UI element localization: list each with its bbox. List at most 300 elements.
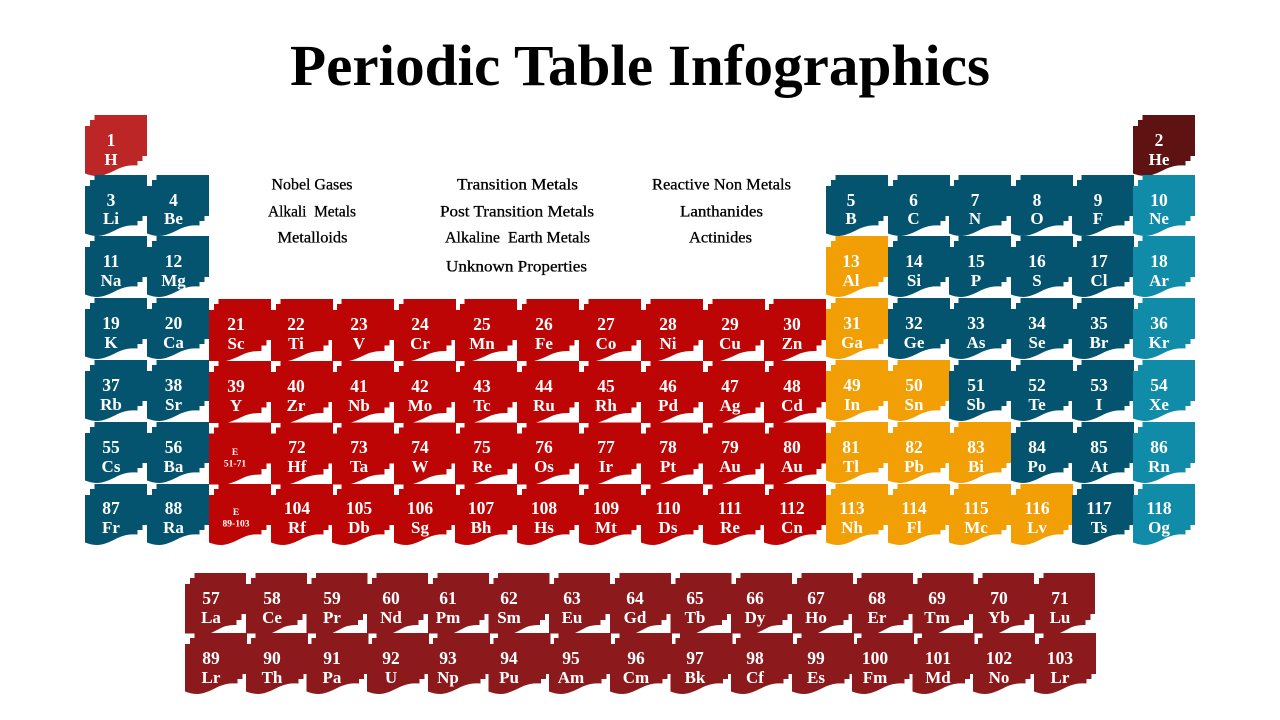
tile: Zr [271, 361, 333, 423]
tile: Tb: Tb [685, 608, 705, 627]
tile: Fl: 114 [901, 498, 927, 518]
tile: Lr 89 [185, 633, 247, 694]
tile: Sr [147, 360, 209, 421]
tile: Bi: 83 [967, 437, 985, 457]
tile: H [85, 115, 147, 176]
tile: S: 16 [1028, 251, 1046, 271]
tile: Fr: 87 [102, 498, 120, 518]
tile: Ce: 58 [263, 588, 281, 608]
tile: Gd: Gd [624, 608, 647, 627]
tile: Re 111 [703, 484, 765, 545]
tile: Po [1011, 422, 1073, 483]
tile: Si: 14 [905, 251, 923, 271]
tile: Se: 34 [1028, 313, 1046, 333]
tile: K: K [104, 333, 118, 352]
tile: Re 111: Re [720, 518, 740, 537]
tile: Ho: 67 [807, 588, 825, 608]
tile: W: W [412, 457, 428, 476]
tile: Ra: 88 [165, 498, 182, 518]
tile: In: In [844, 395, 861, 414]
tile: Nb [332, 361, 394, 423]
tile: As: As [967, 333, 986, 352]
tile: F [1072, 175, 1134, 236]
tile: Tm: 69 [928, 588, 946, 608]
tile: As [949, 298, 1011, 359]
tile: Ba: Ba [164, 457, 184, 476]
tile: Tl: 81 [842, 437, 860, 457]
tile: Md [912, 633, 974, 694]
tile: lanthanide series placeholder: E [232, 448, 238, 458]
tile: Ne: 10 [1150, 190, 1168, 210]
tile: Rn [1133, 422, 1195, 483]
tile: Y: Y [230, 396, 242, 415]
tile: Gd [610, 573, 671, 634]
tile: Os: Os [534, 457, 554, 476]
tile: Nd: 60 [382, 588, 400, 608]
tile: Os: 76 [535, 437, 553, 457]
tile: Mt [579, 484, 641, 545]
tile: Mo: 42 [411, 376, 429, 396]
tile: Zr: Zr [287, 396, 306, 415]
tile: Sc: 21 [227, 314, 245, 334]
tile: Zn: 30 [783, 314, 801, 334]
tile: Yb: Yb [988, 608, 1010, 627]
tile: Sm: Sm [497, 608, 521, 627]
tile: Nb: 41 [350, 376, 368, 396]
tile: Xe [1133, 360, 1195, 421]
tile: Yb [973, 573, 1034, 634]
panel: lanthanides and actinides [185, 573, 1096, 694]
tile: Os [517, 422, 579, 484]
tile: Li [85, 175, 147, 236]
tile: Pd: Pd [658, 396, 678, 415]
tile: W [394, 422, 456, 484]
tile: Re: Re [472, 457, 492, 476]
tile: Es: 99 [807, 648, 825, 668]
tile: P: 15 [967, 251, 985, 271]
tile: Ir [579, 422, 641, 484]
tile: Lv: 116 [1024, 498, 1050, 518]
tile: He: 2 [1155, 130, 1163, 150]
tile: Cr [394, 299, 456, 361]
tile: H: 1 [107, 130, 115, 150]
tile: Ag: Ag [720, 396, 741, 415]
tile: Hf: 72 [288, 437, 306, 457]
legend [268, 176, 791, 276]
tile: Ds: 110 [655, 498, 681, 518]
tile: S: S [1032, 271, 1042, 290]
tile: Fm: 100 [862, 648, 888, 668]
tile: Cm [610, 633, 672, 694]
tile: Ds [641, 484, 703, 545]
legend: metalloids: Metalloids [278, 230, 348, 246]
tile: Cs [85, 422, 147, 483]
tile: Eu: 63 [563, 588, 581, 608]
tile: Ni: 28 [659, 314, 677, 334]
tile: Bk: 97 [686, 648, 704, 668]
tile: Ga: Ga [841, 333, 863, 352]
tile: U [367, 633, 429, 694]
tile: Nd [367, 573, 428, 634]
tile: Og [1133, 484, 1195, 545]
tile: Tl: Tl [843, 457, 859, 476]
tile: Ag: 47 [721, 376, 739, 396]
tile: Rh: 45 [597, 376, 615, 396]
tile: Pu: Pu [499, 668, 519, 687]
legend: nobel gases: Nobel Gases [272, 176, 352, 194]
tile: Ni: Ni [660, 334, 677, 353]
tile: Na [85, 236, 147, 297]
tile: Ru: 44 [535, 376, 553, 396]
tile: Sn [888, 360, 950, 421]
tile: Cf [731, 633, 793, 694]
tile: Hs: Hs [534, 518, 554, 537]
tile: Pb: 82 [905, 437, 923, 457]
tile: Kr: 36 [1150, 313, 1168, 333]
tile: Lv [1011, 484, 1073, 545]
tile: Ne: Ne [1149, 209, 1169, 228]
tile: Y: 39 [227, 376, 245, 396]
tile: Ra: Ra [163, 518, 184, 537]
tile: Mc: 115 [963, 498, 989, 518]
tile: Mn: Mn [469, 334, 495, 353]
tile: Xe: 54 [1150, 375, 1168, 395]
tile: Db [332, 484, 394, 545]
tile: Mo [394, 361, 456, 423]
tile: Ra [147, 484, 209, 545]
tile: Cn: Cn [781, 518, 803, 537]
tile: Nh: 113 [839, 498, 865, 518]
tile: Md: 101 [925, 648, 951, 668]
tile: I: 53 [1090, 375, 1108, 395]
tile: actinide series placeholder: E [233, 508, 239, 518]
tile: Tb [670, 573, 732, 634]
tile: Bh: Bh [471, 518, 492, 537]
tile: Mg: 12 [165, 251, 182, 271]
tile: In: 49 [843, 375, 861, 395]
tile: Kr: Kr [1149, 333, 1170, 352]
tile: Cs: 55 [102, 437, 120, 457]
tile: Mc: Mc [964, 518, 988, 537]
tile: Ni [641, 299, 703, 361]
tile: Pu: 94 [500, 648, 518, 668]
tile: No: 102 [986, 648, 1012, 668]
tile: I [1072, 360, 1134, 421]
tile: C [888, 175, 950, 236]
tile: Cu: Cu [719, 334, 741, 353]
tile: Lu [1034, 573, 1095, 634]
tile: Fr [85, 484, 147, 545]
tile: Pt [641, 422, 703, 484]
tile: Co: 27 [597, 314, 615, 334]
tile: Bk: Bk [685, 668, 706, 687]
tile: Lr 103: 103 [1047, 648, 1073, 668]
tile: Po: Po [1028, 457, 1046, 476]
tile: Nh [826, 484, 888, 545]
tile: C: 6 [909, 190, 918, 210]
tile: Lv: Lv [1027, 518, 1047, 537]
tile: Db: 105 [346, 498, 372, 518]
tile: Cl: 17 [1090, 251, 1108, 271]
tile: Db: Db [348, 518, 370, 537]
tile: K [85, 298, 147, 359]
tile: Bi: Bi [968, 457, 984, 476]
tile: La [185, 573, 246, 634]
tile: Au 79: Au [719, 457, 741, 476]
tile: Ru: Ru [533, 396, 555, 415]
tile: Ca: 20 [165, 313, 182, 333]
tile: Lr 103 [1034, 633, 1096, 694]
tile: Na: 11 [103, 251, 119, 271]
tile: N: N [969, 209, 982, 228]
tile: N [949, 175, 1011, 236]
tile: Pt: Pt [660, 457, 676, 476]
tile: W: 74 [411, 437, 429, 457]
tile: Rb: Rb [100, 395, 122, 414]
tile: Cn: 112 [779, 498, 805, 518]
legend: post transition metals: Post Transition Metals [440, 204, 594, 220]
tile: No [973, 633, 1035, 694]
tile: Te [1011, 360, 1073, 421]
tile: Sb: Sb [967, 395, 985, 414]
tile: Pr [306, 573, 368, 634]
legend: reactive non metals: Reactive Non Metals [652, 176, 791, 194]
tile: Fe: Fe [535, 334, 553, 353]
tile: N: 7 [971, 190, 980, 210]
tile: Sg: 106 [407, 498, 433, 518]
legend: alkaline earth metals: Alkaline Earth Metals [445, 230, 590, 246]
tile: Rh: Rh [595, 396, 617, 415]
tile: Sg: Sg [411, 518, 429, 537]
tile: Li: Li [103, 209, 119, 228]
legend: actinides: Actinides [689, 230, 752, 246]
tile: Cn [764, 484, 826, 545]
tile: Nh: Nh [841, 518, 863, 537]
tile: Te: 52 [1028, 375, 1046, 395]
tile: Te: Te [1028, 395, 1046, 414]
tile: Ba: 56 [165, 437, 182, 457]
tile: P [949, 236, 1011, 297]
tile: Ge [888, 298, 950, 359]
tile: Ta: 73 [350, 437, 368, 457]
tile: Es [792, 633, 854, 694]
tile: Cl: Cl [1090, 271, 1108, 290]
tile: Ta [332, 422, 394, 484]
tile: lanthanide series placeholder: 51-71 [224, 460, 246, 470]
tile: Sm [488, 573, 550, 634]
tile: Pm: Pm [436, 608, 460, 627]
tile: Se: Se [1028, 333, 1046, 352]
tile: At: 85 [1090, 437, 1108, 457]
tile: At: At [1090, 457, 1108, 476]
tile: Sc: Sc [228, 334, 245, 353]
tile: I: I [1096, 395, 1103, 414]
tile: Lu: 71 [1051, 588, 1069, 608]
tile: Ce [246, 573, 307, 634]
tile: Og: 118 [1146, 498, 1172, 518]
tile: Tb: 65 [686, 588, 704, 608]
tile: Sn: 50 [905, 375, 923, 395]
tile: Np: 93 [439, 648, 457, 668]
tile: Rh [579, 361, 641, 423]
tile: Bh [455, 484, 517, 545]
tile: Sr: 38 [165, 375, 182, 395]
tile: V [332, 299, 394, 361]
tile: Md: Md [925, 668, 951, 687]
tile: Cf: 98 [746, 648, 764, 668]
legend: alkali metals: Alkali Metals [268, 204, 356, 220]
tile: Nd: Nd [380, 608, 402, 627]
tile: Zr: 40 [287, 376, 305, 396]
tile: Hs [517, 484, 579, 545]
tile: Na: Na [101, 271, 122, 290]
tile: O: 8 [1033, 190, 1042, 210]
tile: V: V [353, 334, 366, 353]
tile: F: 9 [1094, 190, 1103, 210]
tile: Ir: 77 [597, 437, 615, 457]
tile: Ds: Ds [659, 518, 678, 537]
tile: Ti [271, 299, 333, 361]
tile: Og: Og [1148, 518, 1170, 537]
tile: At [1072, 422, 1134, 483]
tile: Mt: 109 [593, 498, 619, 518]
tile: He [1133, 115, 1195, 176]
tile: La: 57 [202, 588, 220, 608]
tile: Tc: Tc [473, 396, 491, 415]
tile: Tc: 43 [473, 376, 491, 396]
tile: Tm [912, 573, 974, 634]
tile: Am: Am [558, 668, 584, 687]
tile: Mt: Mt [595, 518, 617, 537]
tile: Zn: Zn [782, 334, 803, 353]
tile: Dy: Dy [745, 608, 766, 627]
tile: B: 5 [847, 190, 856, 210]
tile: Rb: 37 [102, 375, 120, 395]
tile: Bk [670, 633, 732, 694]
tile: Au 79: 79 [721, 437, 739, 457]
tile: Zn [764, 299, 826, 361]
tile: Lr 89: 89 [202, 648, 220, 668]
tile: Sb: 51 [967, 375, 985, 395]
tile: Hs: 108 [531, 498, 557, 518]
tile: Lu: Lu [1050, 608, 1070, 627]
tile: Re [455, 422, 517, 484]
tile: Br: Br [1090, 333, 1109, 352]
tile: Nb: Nb [348, 396, 370, 415]
tile: Rf: Rf [288, 518, 306, 537]
tile: Dy: 66 [746, 588, 764, 608]
tile: Tm: Tm [924, 608, 950, 627]
tile: Cd: Cd [781, 396, 803, 415]
tile: Rn: Rn [1148, 457, 1170, 476]
tile: Np [428, 633, 490, 694]
tile: Ta: Ta [350, 457, 369, 476]
tile: Yb: 70 [990, 588, 1008, 608]
tile: Kr [1133, 298, 1195, 359]
tile: Co: Co [596, 334, 616, 353]
tile: Ts [1072, 484, 1134, 545]
tile: Ce: Ce [262, 608, 282, 627]
tile: Br [1072, 298, 1134, 359]
tile: Au 79 [703, 422, 765, 484]
tile: Pr: 59 [323, 588, 341, 608]
tile: Am: 95 [562, 648, 580, 668]
tile: Ti: Ti [288, 334, 304, 353]
tile: Al: Al [842, 271, 860, 290]
tile: Se [1011, 298, 1073, 359]
tile: Ge: Ge [904, 333, 925, 352]
tile: Pa: Pa [323, 668, 342, 687]
tile: Mn: 25 [473, 314, 491, 334]
tile: Y [209, 361, 271, 423]
tile: Pr: Pr [323, 608, 341, 627]
tile: Rn: 86 [1150, 437, 1168, 457]
tile: actinide series placeholder [209, 484, 271, 545]
tile: Sb [949, 360, 1011, 421]
tile: Pt: 78 [659, 437, 677, 457]
tile: Pm [428, 573, 489, 634]
tile: Ar: Ar [1149, 271, 1169, 290]
tile: Fr: Fr [102, 518, 120, 537]
tile: Bi [949, 422, 1011, 483]
tile: La: La [201, 608, 221, 627]
tile: Cu [703, 299, 765, 361]
tile: Re: 75 [473, 437, 491, 457]
tile: Lr 89: Lr [202, 668, 221, 687]
tile: Ga: 31 [843, 313, 861, 333]
tile: Ts: 117 [1086, 498, 1112, 518]
tile: Ca: Ca [163, 333, 184, 352]
tile: Tc [455, 361, 517, 423]
tile: Co [579, 299, 641, 361]
tile: Cl [1072, 236, 1134, 297]
tile: Eu [549, 573, 610, 634]
tile: Cr: 24 [411, 314, 429, 334]
tile: Rf: 104 [284, 498, 310, 518]
tile: B [826, 175, 888, 236]
tile: As: 33 [967, 313, 985, 333]
tile: Ca [147, 298, 209, 359]
tile: Fl [888, 484, 950, 545]
tile: F: F [1093, 209, 1103, 228]
tile: Cd: 48 [783, 376, 801, 396]
tile: Eu: Eu [562, 608, 582, 627]
tile: Ar [1133, 236, 1195, 297]
tile: K: 19 [102, 313, 120, 333]
tile: He: He [1149, 150, 1170, 169]
tile: Ti: 22 [287, 314, 305, 334]
tile: Pu [488, 633, 550, 694]
tile: Gd: 64 [626, 588, 644, 608]
tile: Bh: 107 [468, 498, 494, 518]
tile: Re 111: 111 [718, 498, 742, 518]
tile: Cs: Cs [102, 457, 121, 476]
tile: Cf: Cf [746, 668, 764, 687]
panel: main periodic table [85, 115, 1195, 545]
tile: Am [549, 633, 611, 694]
tile: Ho [792, 573, 853, 634]
tile: Be [147, 175, 209, 236]
tile: Pd: 46 [659, 376, 677, 396]
tile: Au 80: Au [781, 457, 803, 476]
tile: Er: 68 [868, 588, 886, 608]
tile: Rf [271, 484, 333, 545]
tile: Ge: 32 [905, 313, 923, 333]
tile: Be: Be [164, 209, 183, 228]
tile: Ag [703, 361, 765, 423]
tile: Li: 3 [107, 190, 116, 210]
tile: Tl [826, 422, 888, 483]
